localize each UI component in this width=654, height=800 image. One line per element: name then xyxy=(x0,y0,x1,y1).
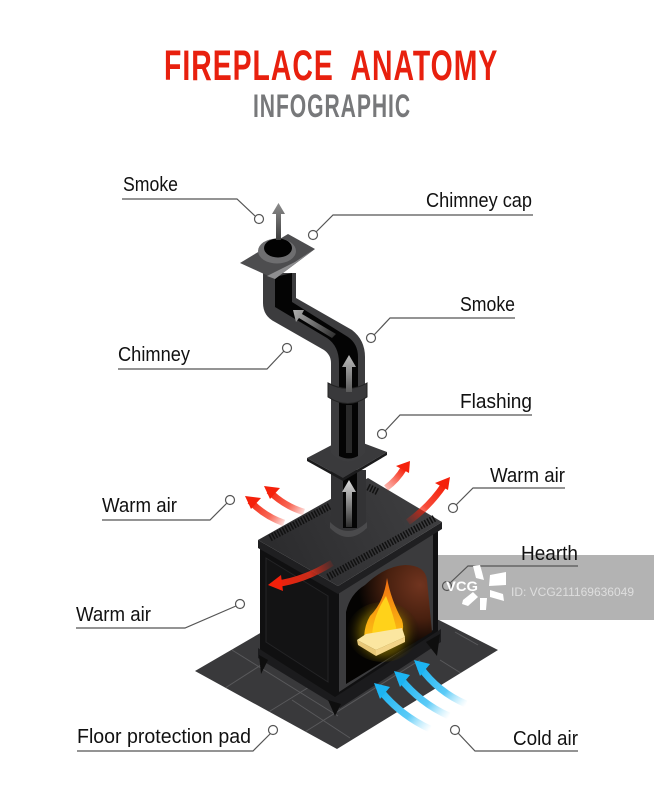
label: smoke in pipe: Smoke xyxy=(460,294,515,316)
cold air arrows xyxy=(374,660,466,729)
chimney lower section xyxy=(330,470,367,537)
smoke arrow vertical xyxy=(342,355,356,392)
stove front frame xyxy=(339,533,433,692)
floor protection pad xyxy=(195,617,498,749)
flame xyxy=(364,578,403,640)
smoke arrow diagonal xyxy=(293,310,336,338)
label: smoke top xyxy=(122,174,264,224)
label: smoke in pipe xyxy=(366,294,515,342)
label: chimney xyxy=(118,344,292,369)
watermark band xyxy=(438,543,654,620)
title: FIREPLACE ANATOMY xyxy=(164,41,497,89)
label: warm air lower xyxy=(76,600,244,628)
subtitle: INFOGRAPHIC xyxy=(253,87,410,124)
label: hearth: Hearth xyxy=(521,543,578,565)
label: chimney: Chimney xyxy=(118,344,190,366)
label: warm air lower: Warm air xyxy=(76,604,151,626)
watermark logo xyxy=(446,565,506,610)
label: cold air xyxy=(450,726,578,751)
stove side panel xyxy=(266,558,328,682)
label: flashing xyxy=(378,391,532,438)
flashing plate xyxy=(307,437,387,481)
label: hearth xyxy=(442,543,578,590)
stove back shell xyxy=(260,525,438,700)
top grilles xyxy=(270,487,435,577)
chimney cap xyxy=(240,234,315,279)
label: warm air left xyxy=(102,495,234,520)
label: floor protection pad: Floor protection pad xyxy=(77,726,251,748)
fire glow xyxy=(347,602,419,662)
label: warm air right: Warm air xyxy=(490,465,565,487)
label: warm air right xyxy=(448,465,565,512)
label: warm air left: Warm air xyxy=(102,495,177,517)
stove top plate xyxy=(258,478,442,586)
label: chimney cap: Chimney cap xyxy=(426,190,532,212)
firebox opening xyxy=(346,565,432,684)
watermark id: ID: VCG211169636049 xyxy=(511,587,634,599)
label: smoke top: Smoke xyxy=(123,174,178,196)
pipe band xyxy=(328,383,367,404)
smoke arrow up xyxy=(272,203,285,240)
base and legs xyxy=(258,629,441,708)
label: chimney cap xyxy=(308,190,533,240)
red arrows behind stove xyxy=(245,461,450,523)
watermark logo: VCG xyxy=(446,578,478,594)
logs xyxy=(357,628,405,656)
front warm air arrow xyxy=(268,563,332,591)
chimney pipe xyxy=(263,273,367,462)
label: flashing: Flashing xyxy=(460,391,532,413)
stove body xyxy=(258,478,442,716)
label: cold air: Cold air xyxy=(513,728,578,750)
